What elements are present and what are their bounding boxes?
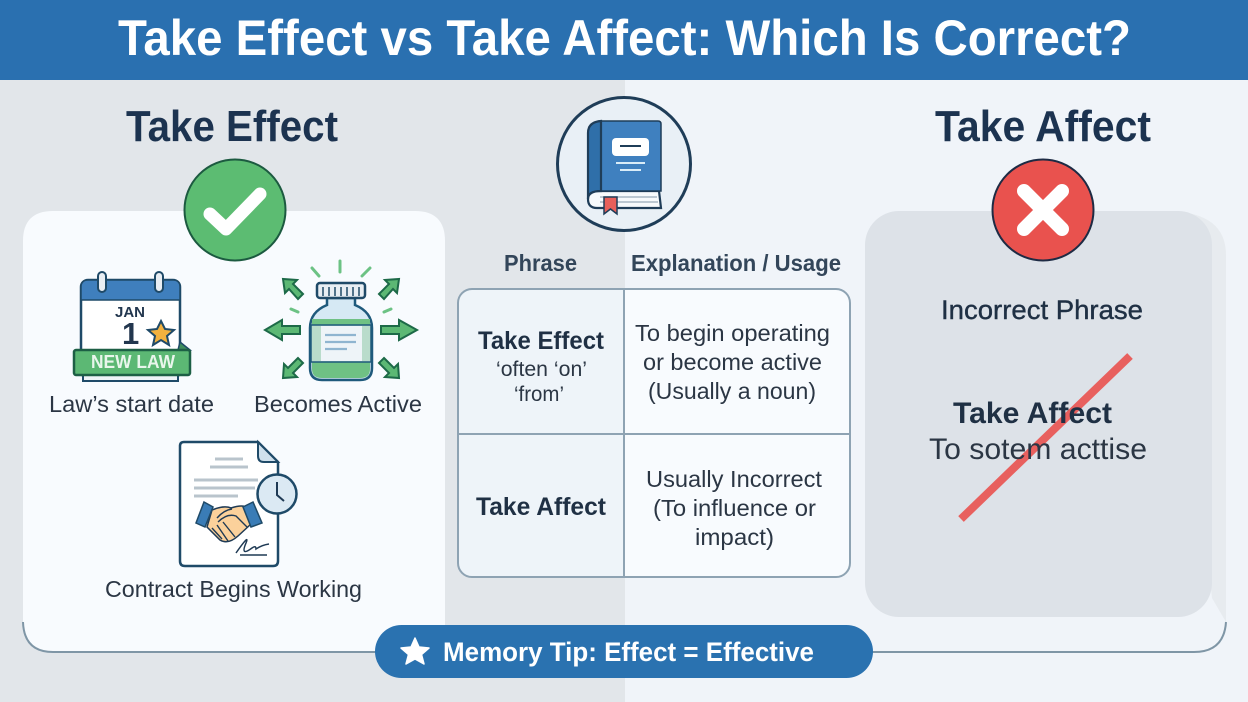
icon: calendar new law: 1 [122,316,139,351]
icon: green check [184,160,286,260]
heading: take affect: Take Affect [935,102,1151,151]
icon: red cross [992,160,1094,260]
cell: take effect: ‘often ‘on’ [496,358,587,381]
cell: take effect explanation: or become active [643,349,822,375]
memory tip pill [375,625,873,678]
label: incorrect phrase: Incorrect Phrase [941,295,1143,325]
arrow: right [381,320,417,340]
table heading: phrase: Phrase [504,250,577,276]
label: law's start date: Law’s start date [49,391,214,417]
icon: medicine bottle with arrows [265,261,417,380]
cell: take affect explanation: Usually Incorrect [646,466,823,492]
panel: take affect card [865,211,1226,652]
cell: take affect: Take Affect [476,493,607,521]
cell: take affect explanation: impact) [695,524,774,550]
cell: take affect explanation [646,466,823,550]
crossed out phrase: To sotem acttise [929,433,1147,466]
arrow: upper left [283,279,303,299]
icon: calendar new law [74,272,190,381]
cell: take effect [478,327,605,406]
cell: take effect explanation: To begin operating [635,320,830,346]
arrow: lower right [379,358,399,378]
crossed out phrase [929,397,1147,466]
arrow: left [265,320,300,340]
crossed out phrase: Take Affect [953,397,1112,430]
header banner with title: Take Effect vs Take Affect: Which Is Correct? [118,10,1131,66]
comparison table [458,289,850,577]
arrow: upper right [379,279,399,299]
cell: take effect: ‘from’ [514,383,564,406]
panel: take effect card [23,211,445,652]
cell: take effect: Take Effect [478,327,605,355]
label: contract begins working: Contract Begins Working [105,576,362,602]
arrow: lower left [283,358,303,378]
icon: book in circle [558,98,690,230]
tip text: Memory Tip: Effect = Effective [443,637,814,667]
strike-through line [961,356,1130,519]
icon: calendar new law: JAN [115,304,145,321]
cell: take affect explanation: (To influence or [653,495,816,521]
cell: take effect explanation [635,320,830,404]
icon: calendar new law: NEW LAW [91,352,175,372]
table heading: explanation: Explanation / Usage [631,250,841,276]
heading: take effect: Take Effect [126,102,338,151]
cell: take effect explanation: (Usually a noun) [648,378,816,404]
icon: signed contract with handshake and clock [180,442,296,566]
icon: star [401,638,429,664]
label: becomes active: Becomes Active [254,391,422,417]
header banner with title [0,0,1248,80]
